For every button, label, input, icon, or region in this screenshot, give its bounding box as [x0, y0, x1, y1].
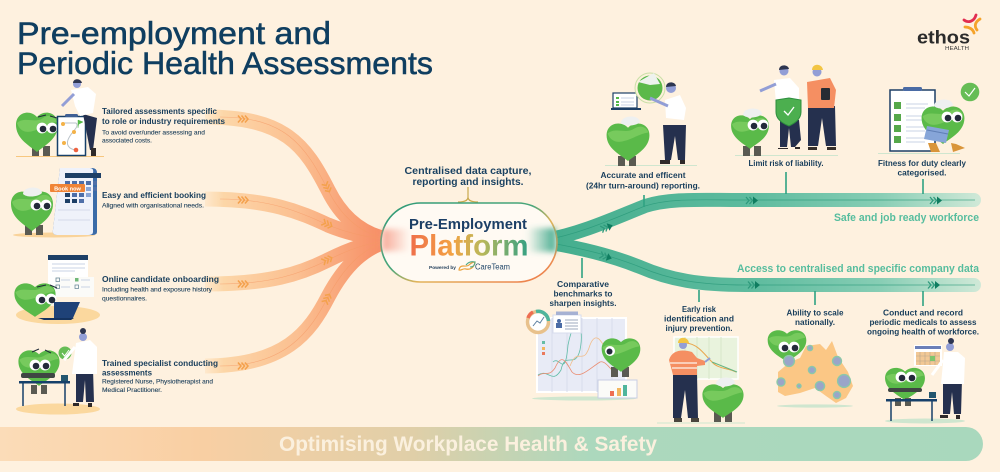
label: Fitness for duty clearly: [878, 159, 967, 168]
heading: Online candidate onboarding: [102, 275, 219, 284]
caption: centralised data: Centralised data capture,: [404, 166, 532, 177]
heading: Trained specialist conducting: [102, 359, 218, 368]
label: periodic medicals to assess: [870, 318, 977, 327]
brace: link from caption to platform: [458, 187, 478, 202]
description: Including health and exposure history: [102, 288, 212, 294]
illustration: clipboard, mascot with mask: [878, 83, 979, 154]
caption: centralised data: reporting and insights.: [412, 177, 524, 188]
description: [102, 288, 212, 302]
central platform hub: Pre-Employment: [409, 216, 527, 233]
description: [102, 380, 213, 394]
label: Comparative: [557, 280, 610, 289]
title: [17, 15, 433, 81]
panel: online onboarding: [14, 255, 219, 324]
button: book now: Book now: [54, 186, 82, 192]
panel: fitness for duty: [878, 83, 979, 178]
central platform hub: Powered by: [429, 265, 457, 270]
panel: benchmarks: [528, 280, 640, 400]
illustration: mascot at table with clinician and calendar: [885, 338, 965, 424]
description: Aligned with organisational needs.: [102, 204, 204, 210]
illustration: Australia map with mascot: [768, 330, 853, 408]
description: questionnaires.: [102, 296, 147, 302]
label: sharpen insights.: [550, 299, 616, 308]
description: Registered Nurse, Physiotherapist and: [102, 380, 213, 386]
orange ribbons: inputs into platform: [205, 116, 392, 370]
logo: ethos health: [917, 15, 980, 52]
panel: scale nationally: [768, 308, 853, 408]
label: [878, 159, 967, 178]
title: Periodic Health Assessments: [17, 45, 433, 81]
label: Ability to scale: [786, 308, 844, 318]
panel: periodic medicals: [867, 308, 979, 424]
illustration: worker at chart with mascot: [657, 337, 745, 423]
label: [786, 308, 844, 327]
label: categorised.: [898, 168, 946, 178]
label: (24hr turn-around) reporting.: [586, 182, 700, 190]
connector stems: [582, 172, 923, 306]
label: Early risk: [682, 305, 717, 314]
central platform hub: CareTeam: [475, 262, 510, 272]
panel: liability: [731, 65, 838, 168]
label: [664, 305, 734, 333]
label: ongoing health of workforce.: [867, 328, 979, 336]
label: identification and: [664, 314, 734, 324]
outcome label: safe and job ready: Safe and job ready workforce: [834, 212, 979, 224]
outcome label: access to data: Access to centralised and specific company data: [737, 263, 980, 275]
illustration: mascot at table with specialist: [16, 328, 100, 414]
banner: optimising workplace health and safety: [0, 427, 983, 461]
illustration: mascot with route clipboard: [16, 79, 104, 156]
illustration: mascot, magnifier, laptop, clinician: [605, 73, 697, 166]
logo: ethos health: HEALTH: [945, 46, 969, 52]
label: Limit risk of liability.: [748, 159, 824, 168]
central platform hub: Platform: [410, 230, 528, 262]
label: [867, 308, 979, 336]
central platform hub: [381, 203, 557, 282]
caption: centralised data: [404, 166, 532, 188]
banner: optimising workplace health and safety: Optimising Workplace Health & Safety: [279, 433, 657, 456]
description: Medical Practitioner.: [102, 388, 162, 394]
label: nationally.: [795, 318, 835, 327]
description: To avoid over/under assessing and: [102, 130, 205, 136]
description: associated costs.: [102, 138, 152, 144]
panel: early risk identification: [657, 305, 745, 423]
illustration: mascot, shield and two workers: [731, 65, 838, 156]
panel: trained specialist: assessments: [102, 368, 152, 378]
panel: tailored assessments: to role or industry requirements: [102, 117, 225, 126]
heading: Easy and efficient booking: [102, 191, 206, 200]
panel: easy booking: [11, 168, 206, 238]
label: Accurate and efficent: [600, 171, 686, 180]
panel: trained specialist: [16, 328, 218, 414]
label: injury prevention.: [666, 324, 732, 333]
label: benchmarks to: [554, 290, 613, 298]
description: [102, 130, 205, 144]
title: Pre-employment and: [17, 15, 331, 51]
green ribbons: outcomes from platform: [545, 196, 975, 289]
panel: tailored assessments: [16, 79, 225, 156]
label: [550, 280, 616, 308]
illustration: mascot with booking phone: [11, 168, 101, 238]
logo: ethos health: ethos: [917, 26, 970, 48]
panel: reporting: [586, 73, 700, 190]
illustration: mascot with laptop and form: [14, 255, 100, 324]
illustration: chart dashboard with mascot: [528, 311, 640, 400]
heading: Tailored assessments specific: [102, 107, 217, 116]
label: [586, 171, 700, 190]
label: Conduct and record: [883, 308, 963, 318]
